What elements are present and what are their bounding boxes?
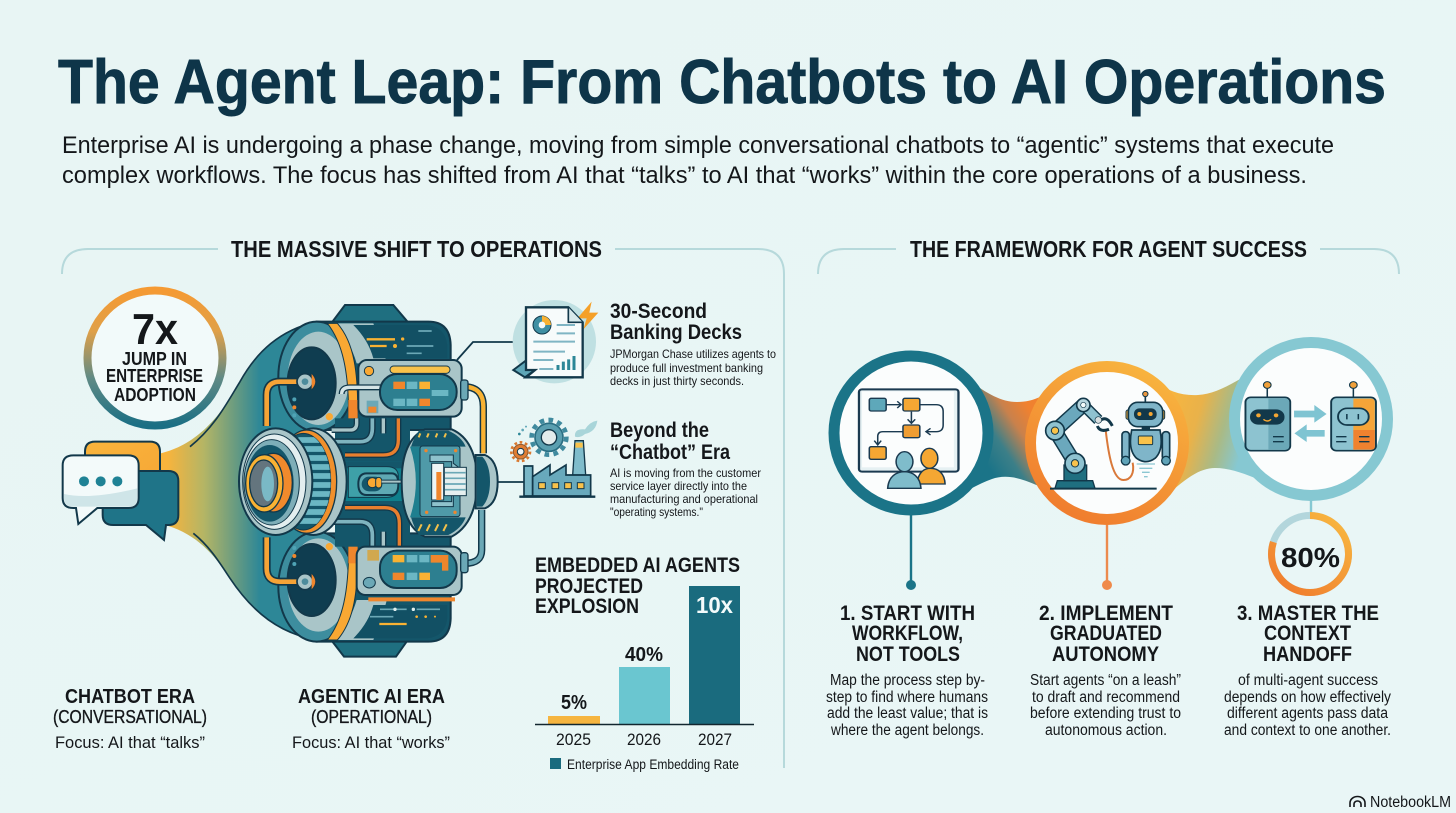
text block: 30-second banking decks: 30-Second (610, 300, 707, 323)
axis labels: 2025 (556, 730, 591, 749)
text block: 30-second banking decks: decks in just thirty seconds. (610, 374, 744, 388)
text block: beyond the chatbot era: AI is moving from the customer (610, 466, 761, 480)
step 1 text: where the agent belongs. (830, 722, 984, 739)
callout: agentic ai era (292, 686, 450, 752)
step 1 text: NOT TOOLS (856, 643, 960, 666)
text block: beyond the chatbot era: Beyond the (610, 419, 709, 442)
axis labels (556, 730, 732, 749)
step 3 text: HANDOFF (1263, 643, 1352, 666)
bar: 2026 (619, 667, 670, 724)
intro text (62, 132, 1334, 189)
step 2 text: AUTONOMY (1052, 643, 1159, 666)
connector band: step 1 to step 2 (950, 365, 1066, 500)
callout: agentic ai era: AGENTIC AI ERA (298, 686, 445, 708)
step 3 text: 3. MASTER THE (1237, 602, 1379, 625)
donut chart: 80% (1272, 516, 1349, 593)
heading: the framework for agent success: THE FRAMEWORK FOR AGENT SUCCESS (910, 236, 1307, 262)
panel: massive shift illustration (53, 290, 776, 772)
axis labels: 2026 (627, 730, 661, 749)
stat ring: 7x jump in enterprise adoption: 7x (132, 305, 178, 354)
heading: the massive shift to operations: THE MASSIVE SHIFT TO OPERATIONS (231, 236, 602, 262)
step 3 text: and context to one another. (1224, 722, 1391, 739)
stat ring: 7x jump in enterprise adoption: ADOPTION (114, 385, 196, 405)
donut chart: 80%: 80% (1281, 542, 1340, 573)
text block: beyond the chatbot era: "operating systems." (610, 505, 703, 519)
callout: agentic ai era: Focus: AI that “works” (292, 733, 450, 752)
legend: Enterprise App Embedding Rate (567, 757, 739, 772)
text block: beyond the chatbot era (610, 419, 761, 519)
chart title: EMBEDDED AI AGENTS (535, 554, 740, 577)
title: The Agent Leap: From Chatbots to AI Operations (58, 48, 1386, 117)
connector band: step 2 to step 3 (1150, 372, 1255, 502)
step 2 text: before extending trust to (1030, 705, 1181, 722)
step 3 text: depends on how effectively (1224, 689, 1391, 706)
text block: beyond the chatbot era: manufacturing and operational (610, 492, 758, 506)
step 3 circle: agent handoff (1234, 342, 1388, 496)
step 3 text: of multi-agent success (1238, 672, 1378, 689)
step 1 text (826, 602, 988, 739)
funnel and engine illustration (158, 305, 498, 657)
timeline dot 2 (1102, 580, 1112, 590)
axis labels: 2027 (698, 730, 732, 749)
stat ring: 7x jump in enterprise adoption: JUMP IN (122, 349, 187, 369)
step 3 text: different agents pass data (1227, 705, 1388, 722)
bar: 2025 (548, 716, 600, 724)
step 1 text: step to find where humans (826, 689, 988, 706)
value: 5%: 5% (561, 692, 587, 714)
intro text: complex workflows. The focus has shifted from AI that “talks” to AI that “works” within the core operations of a business. (62, 162, 1307, 189)
chart title: EXPLOSION (535, 595, 639, 618)
icon: two agents exchanging context (1245, 382, 1376, 451)
panel: framework for agent success (826, 342, 1391, 739)
icon: chat bubbles (63, 442, 178, 540)
step 2 text: 2. IMPLEMENT (1039, 602, 1173, 625)
text block: beyond the chatbot era: “Chatbot” Era (610, 441, 730, 464)
step 2 circle: graduated autonomy (1030, 366, 1184, 520)
icon: banking deck document (513, 300, 598, 383)
callout: chatbot era: Focus: AI that “talks” (55, 733, 205, 752)
step 1 text: WORKFLOW, (852, 622, 963, 645)
icon: factory and gears (511, 420, 597, 497)
step 1 circle: workflow map (834, 356, 988, 510)
chart title: PROJECTED (535, 575, 643, 598)
timeline dot 1 (906, 580, 916, 590)
step 1 text: 1. START WITH (840, 602, 975, 625)
callout: chatbot era: CHATBOT ERA (65, 686, 195, 708)
icon: workflow and people (859, 389, 958, 488)
text block: 30-second banking decks: JPMorgan Chase utilizes agents to (610, 347, 776, 361)
text block: 30-second banking decks (610, 300, 776, 388)
step 2 text: GRADUATED (1050, 622, 1162, 645)
step 1 text: add the least value; that is (827, 705, 988, 722)
step 3 text: CONTEXT (1264, 622, 1351, 645)
icon: robot arm and robot on a leash (1046, 391, 1170, 489)
stat ring: 7x jump in enterprise adoption (88, 290, 222, 426)
bar: 2027 (689, 586, 740, 724)
intro text: Enterprise AI is undergoing a phase change, moving from simple conversational chatbots to “agentic” systems that execute (62, 132, 1334, 159)
callout: chatbot era (53, 686, 207, 752)
chart title (535, 554, 740, 618)
step 2 text: autonomous action. (1045, 722, 1167, 739)
stat ring: 7x jump in enterprise adoption: ENTERPRISE (106, 366, 203, 386)
step 2 text: Start agents “on a leash” (1030, 672, 1181, 689)
value: 40%: 40% (625, 644, 663, 666)
callout: chatbot era: (CONVERSATIONAL) (53, 707, 207, 727)
step 2 text: to draft and recommend (1032, 689, 1180, 706)
callout: agentic ai era: (OPERATIONAL) (311, 707, 432, 727)
step 3 text (1224, 602, 1391, 739)
text block: beyond the chatbot era: service layer directly into the (610, 479, 747, 493)
step 2 text (1030, 602, 1181, 739)
text block: 30-second banking decks: Banking Decks (610, 321, 742, 344)
step 1 text: Map the process step by- (830, 672, 985, 689)
text block: 30-second banking decks: produce full investment banking (610, 361, 763, 375)
value: 10x: 10x (696, 592, 733, 618)
notebooklm logo and wordmark: NotebookLM (1370, 794, 1451, 811)
bar chart: embedded ai agents (535, 554, 754, 772)
